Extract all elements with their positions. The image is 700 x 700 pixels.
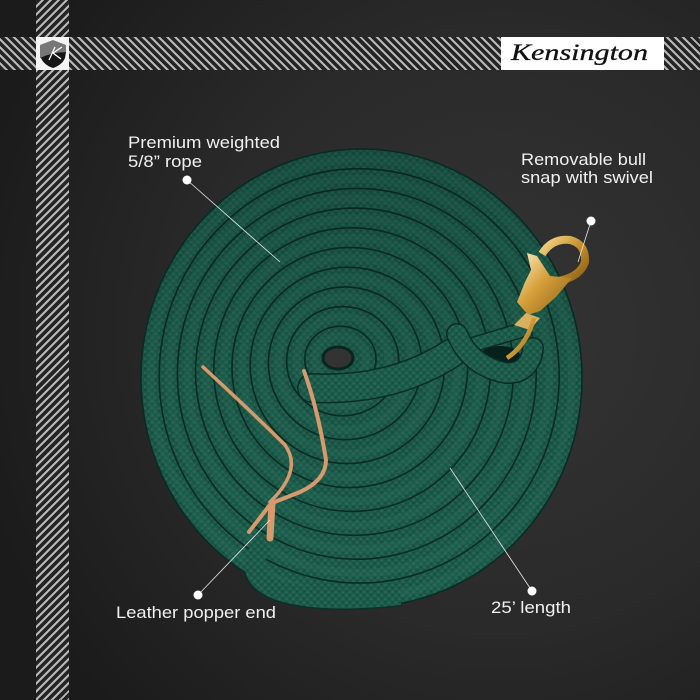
callout: rope: 5/8” rope [128,153,202,171]
callout: snap [521,151,653,262]
rope end underlay [255,543,400,599]
callout: rope: Premium weighted [128,134,280,152]
swivel [514,313,540,330]
horizontal hatched band [0,37,700,70]
brass bull snap [507,240,585,358]
icon: Kensington shield logo [36,37,69,70]
brand logo box: Kensington [510,40,648,65]
snap body [517,253,572,315]
leather popper [203,367,326,538]
rope coils [141,149,582,607]
swivel hook [507,318,534,358]
thin rope to ring [465,330,522,347]
callout: length [450,468,571,617]
thick rope from centre [312,353,452,388]
brand logo box [501,37,664,70]
callout: popper [116,520,276,622]
callout: snap: snap with swivel [521,169,653,187]
snap ring [542,240,585,281]
coiled green rope [140,149,582,607]
dark gap behind snap ring [480,346,520,366]
rope end bulge [255,543,400,599]
callout: popper: Leather popper end [116,604,276,622]
rope splice head [457,334,533,373]
centre hole [323,347,353,369]
callout: snap: Removable bull [521,151,646,169]
coil highlights [151,159,572,597]
top shading [140,149,582,607]
vertical hatched band [36,0,69,700]
callout: length: 25’ length [491,599,571,617]
callout: rope [128,134,280,262]
